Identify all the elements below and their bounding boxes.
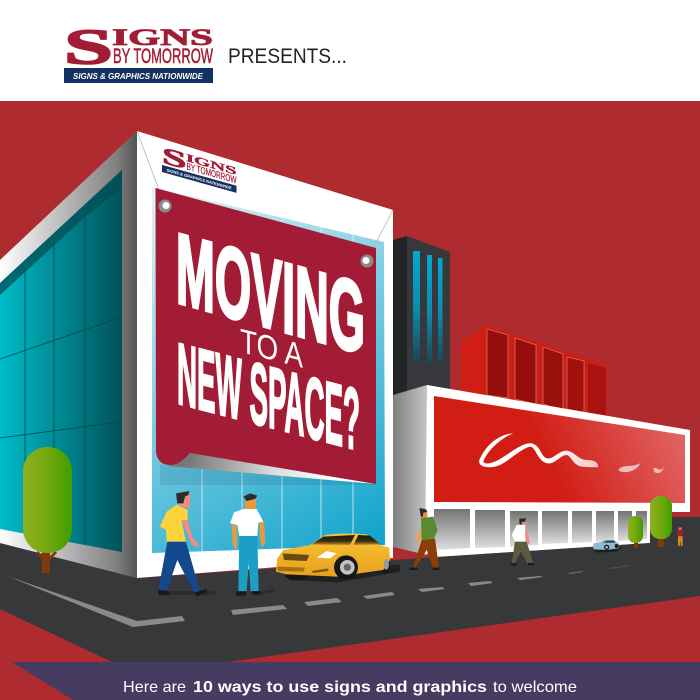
purple text banner (12, 662, 700, 700)
red rear building (461, 325, 607, 420)
mini logo on building: S (162, 143, 186, 175)
ground floor windows (434, 509, 647, 550)
logo: Signs By Tomorrow (64, 18, 213, 83)
headline TO A: TO A (240, 322, 303, 376)
big tree (23, 447, 72, 573)
main building front face (137, 131, 393, 578)
person in white shirt (230, 493, 275, 596)
logo: Signs By Tomorrow: SIGNS & GRAPHICS NATIONWIDE (73, 71, 203, 81)
small tree (628, 516, 643, 548)
logo: Signs By Tomorrow: BY TOMORROW (113, 45, 213, 68)
mini logo on building: IGNS (186, 152, 236, 178)
logo: Signs By Tomorrow: IGNS (112, 25, 213, 50)
person in yellow shirt (158, 491, 215, 597)
banner text (123, 679, 577, 696)
tiny blue car (593, 540, 623, 553)
road (0, 517, 700, 662)
mini logo on building: SIGNS & GRAPHICS NATIONWIDE (166, 168, 232, 191)
road markings (7, 565, 631, 627)
hanging wires (137, 131, 393, 260)
storefront glass (152, 187, 385, 553)
banner curl (168, 453, 376, 484)
main building left wall (0, 131, 137, 578)
banner text: to welcome (493, 679, 577, 696)
grommet left (158, 200, 172, 212)
person in white shirt, distant (511, 518, 534, 566)
tiny person (677, 527, 683, 546)
mini logo on building (162, 143, 237, 193)
infographic canvas: MOVING (176, 212, 365, 376)
grommet right (360, 254, 374, 268)
banner text: 10 ways to use signs and graphics (193, 679, 487, 696)
presents heading: PRESENTS... (228, 45, 347, 68)
banner text: Here are (123, 679, 186, 696)
red sign with scribble (434, 396, 685, 503)
mini logo on building: BY TOMORROW (186, 162, 237, 186)
yellow car (276, 533, 400, 582)
logo: Signs By Tomorrow: S (64, 18, 113, 74)
dark tower (393, 236, 450, 395)
medium tree (650, 496, 672, 547)
person in green shirt (409, 508, 439, 570)
low white building with red sign (393, 385, 690, 557)
banner (156, 188, 376, 484)
